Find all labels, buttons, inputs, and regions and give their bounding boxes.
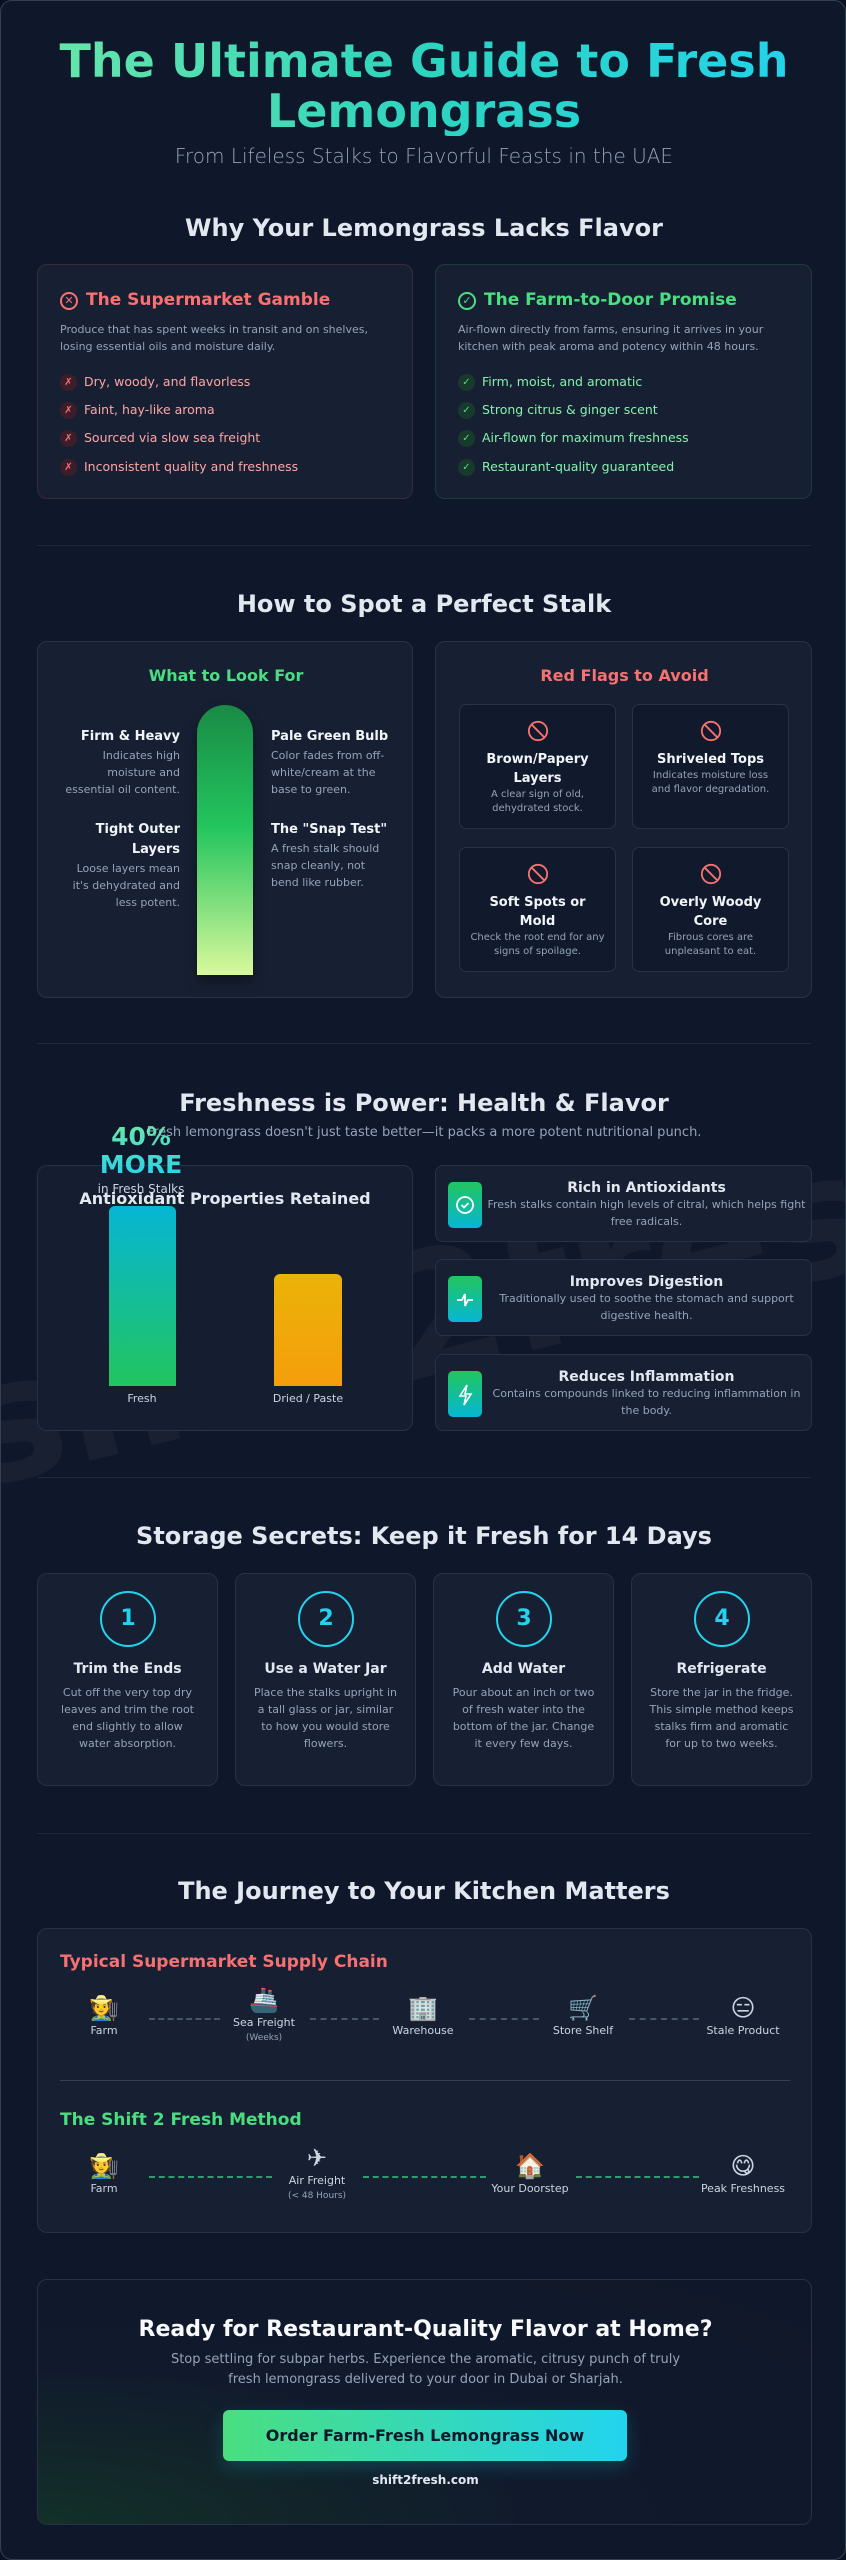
step 4: [631, 1573, 812, 1786]
flag: soft spots: signs of spoilage.: [494, 946, 581, 957]
label: firm & heavy: moisture and: [107, 766, 180, 779]
list: gamble negatives: ✗: [64, 433, 73, 444]
flag: woody core: [632, 847, 789, 972]
step 3: [433, 1573, 614, 1786]
heading: journey: The Journey to Your Kitchen Matters: [178, 1877, 670, 1905]
flag: soft spots: Soft Spots or: [489, 895, 586, 910]
panel: farm to door: [435, 264, 812, 499]
button: order: [223, 2410, 627, 2461]
label: tight outer layers: it's dehydrated and: [73, 879, 180, 892]
step 2: [235, 1573, 416, 1786]
text: website: shift2fresh.com: [372, 2473, 479, 2487]
label: snap test: A fresh stalk should: [271, 842, 379, 855]
label: tight outer layers: [73, 822, 180, 909]
flow: shift 2 fresh: Farm: [90, 2182, 118, 2195]
label: snap test: [271, 822, 387, 889]
panel: red flags: [435, 641, 812, 998]
heading: farm to door: The Farm-to-Door Promise: [484, 290, 737, 310]
flag: brown papery layers: Layers: [513, 771, 562, 786]
step 3: 3: [516, 1606, 532, 1631]
card: inflammation: Reduces Inflammation: [559, 1369, 734, 1385]
flow: supermarket chain: 😑: [730, 1994, 756, 2022]
label: pale green bulb: white/cream at the: [271, 766, 375, 779]
flag: soft spots: [459, 847, 616, 972]
flag: shriveled tops: Indicates moisture loss: [653, 770, 768, 781]
heading: cta: Ready for Restaurant-Quality Flavor at Home?: [138, 2317, 712, 2342]
label: tight outer layers: Loose layers mean: [77, 862, 180, 875]
label: firm & heavy: essential oil content.: [65, 783, 180, 796]
panel: call to action: [37, 2279, 812, 2525]
callout: in fresh stalks: in Fresh Stalks: [98, 1182, 184, 1196]
text: promise description: Air-flown directly from farms, ensuring it arrives in your kitchen with peak aroma and potency within 48 hours.: [458, 323, 763, 353]
panel: what to look for: [37, 641, 413, 998]
bar: dried: [274, 1274, 342, 1386]
heading: freshness is power: Freshness is Power: Health & Flavor: [179, 1089, 669, 1117]
flow: supermarket chain: 🧑‍🌾: [89, 1994, 119, 2022]
flow: supermarket chain: Stale Product: [706, 2024, 780, 2037]
step 1: Trim the Ends: [73, 1661, 182, 1677]
list: promise positives: Restaurant-quality guaranteed: [482, 459, 674, 474]
card: inflammation: [435, 1354, 812, 1431]
label: tight outer layers: less potent.: [116, 896, 180, 909]
heading: supermarket gamble: The Supermarket Gamble: [86, 290, 330, 310]
list: gamble negatives: Sourced via slow sea freight: [84, 430, 260, 445]
flow: supermarket chain: [89, 1986, 780, 2043]
step 3: Add Water: [482, 1661, 565, 1677]
label: firm & heavy: [65, 729, 180, 796]
flag: shriveled tops: Shriveled Tops: [657, 752, 764, 767]
flow: shift 2 fresh: ✈: [307, 2144, 327, 2172]
flow: supermarket chain: Warehouse: [392, 2024, 454, 2037]
button: order: Order Farm-Fresh Lemongrass Now: [266, 2426, 584, 2445]
flag: woody core: Fibrous cores are: [668, 932, 753, 943]
flag: woody core: Core: [694, 914, 727, 929]
list: gamble negatives: Faint, hay-like aroma: [84, 402, 215, 417]
text: freshness subtitle: Fresh lemongrass doesn't just taste better—it packs a more potent nutritional punch.: [147, 1125, 701, 1140]
card: antioxidants: Fresh stalks contain high levels of citral, which helps fight free radicals.: [488, 1198, 805, 1228]
step 4: Store the jar in the fridge. This simple method keeps stalks firm and aromatic for up to two weeks.: [650, 1686, 793, 1750]
flag: soft spots: Mold: [520, 914, 555, 929]
label: pale green bulb: [271, 729, 388, 796]
label: snap test: The "Snap Test": [271, 822, 387, 837]
label: pale green bulb: Pale Green Bulb: [271, 729, 388, 744]
flag: brown papery layers: dehydrated stock.: [492, 803, 583, 814]
heading: farm to door: ✓: [462, 294, 472, 307]
list: gamble negatives: ✗: [64, 377, 73, 388]
list: gamble negatives: ✗: [64, 405, 73, 416]
panel: supermarket gamble: [37, 264, 413, 499]
card: antioxidants: [435, 1165, 812, 1242]
flag: brown papery layers: Brown/Papery: [486, 752, 589, 767]
flow: supermarket chain: 🛒: [568, 1994, 598, 2022]
list: promise positives: ✓: [462, 405, 471, 416]
flag: brown papery layers: A clear sign of old,: [491, 789, 584, 800]
heading: what to look for: What to Look For: [149, 666, 303, 685]
label: snap test: bend like rubber.: [271, 876, 364, 889]
flow: supermarket chain: Store Shelf: [553, 2024, 613, 2037]
heading: storage secrets: Storage Secrets: Keep it Fresh for 14 Days: [136, 1522, 712, 1550]
subtitle: From Lifeless Stalks to Flavorful Feasts in the UAE: [175, 144, 673, 168]
heading: red flags: Red Flags to Avoid: [540, 666, 709, 685]
list: gamble negatives: Inconsistent quality and freshness: [84, 459, 298, 474]
step 4: 4: [714, 1606, 730, 1631]
callout: 40% more: MORE: [100, 1150, 182, 1179]
callout: 40% more: 40%: [111, 1122, 171, 1151]
label: firm & heavy: Firm & Heavy: [81, 729, 180, 744]
step 2: Use a Water Jar: [264, 1661, 387, 1677]
step 1: 1: [120, 1606, 136, 1631]
text: gamble description: Produce that has spent weeks in transit and on shelves, losing essential oils and moisture daily.: [60, 323, 368, 353]
label: dried: Dried / Paste: [273, 1392, 343, 1405]
heading: shift 2 fresh method: The Shift 2 Fresh Method: [60, 2110, 302, 2130]
label: tight outer layers: Layers: [132, 842, 180, 857]
flag: brown papery layers: [459, 704, 616, 829]
text: cta description: Stop settling for subpar herbs. Experience the aromatic, citrusy punch of truly fresh lemongrass delivered to your door in Dubai or Sharjah.: [171, 2352, 680, 2387]
flow: shift 2 fresh: (< 48 Hours): [288, 2191, 346, 2201]
label: snap test: snap cleanly, not: [271, 859, 365, 872]
chart title: Antioxidant Properties Retained: [79, 1189, 371, 1208]
flow: supermarket chain: 🏢: [408, 1994, 438, 2022]
step 2: 2: [318, 1606, 334, 1631]
flow: supermarket chain: Sea Freight: [233, 2016, 295, 2029]
step 4: Refrigerate: [676, 1661, 767, 1677]
flow: shift 2 fresh: Air Freight: [289, 2174, 345, 2187]
list: gamble negatives: ✗: [64, 462, 73, 473]
flag: woody core: Overly Woody: [660, 895, 761, 910]
step 1: Cut off the very top dry leaves and trim the root end slightly to allow water absorption.: [61, 1686, 194, 1750]
heading: why lacks flavor: Why Your Lemongrass Lacks Flavor: [185, 214, 663, 242]
label: fresh: Fresh: [127, 1392, 157, 1405]
list: promise positives: [458, 374, 689, 476]
step 3: Pour about an inch or two of fresh water into the bottom of the jar. Change it every few days.: [453, 1686, 594, 1750]
list: promise positives: ✓: [462, 377, 471, 388]
list: promise positives: Firm, moist, and aromatic: [482, 374, 642, 389]
label: firm & heavy: Indicates high: [103, 749, 180, 762]
title: The Ultimate Guide to Fresh: [60, 34, 788, 88]
heading: spot a perfect stalk: How to Spot a Perfect Stalk: [237, 590, 611, 618]
list: gamble negatives: [60, 374, 298, 476]
panel: journey: [37, 1928, 812, 2233]
flow: shift 2 fresh: Your Doorstep: [491, 2182, 569, 2195]
step 2: Place the stalks upright in a tall glass or jar, similar to how you would store flowers.: [254, 1686, 397, 1750]
title: [1, 36, 846, 136]
flag: woody core: unpleasant to eat.: [665, 946, 756, 957]
list: promise positives: Strong citrus & ginger scent: [482, 402, 658, 417]
flow: supermarket chain: 🚢: [249, 1986, 279, 2014]
label: tight outer layers: Tight Outer: [96, 822, 180, 837]
label: pale green bulb: base to green.: [271, 783, 351, 796]
flow: supermarket chain: (Weeks): [246, 2033, 282, 2043]
heading: supermarket gamble: ✕: [64, 294, 74, 307]
list: promise positives: Air-flown for maximum freshness: [482, 430, 689, 445]
step 1: [37, 1573, 218, 1786]
label: pale green bulb: Color fades from off-: [271, 749, 384, 762]
flow: shift 2 fresh: 🧑‍🌾: [89, 2152, 119, 2180]
flag: shriveled tops: and flavor degradation.: [652, 784, 769, 795]
callout: 40% more: [71, 1123, 211, 1179]
list: promise positives: ✓: [462, 433, 471, 444]
card: digestion: Improves Digestion: [570, 1274, 723, 1290]
flag: soft spots: Check the root end for any: [470, 932, 605, 943]
illustration: stalk: [197, 705, 253, 975]
heading: supermarket chain: Typical Supermarket Supply Chain: [60, 1952, 388, 1972]
flow: shift 2 fresh: Peak Freshness: [701, 2182, 785, 2195]
flow: supermarket chain: Farm: [90, 2024, 118, 2037]
flow: shift 2 fresh: [89, 2144, 785, 2201]
flag: shriveled tops: [632, 704, 789, 829]
title: Lemongrass: [267, 84, 581, 138]
flow: shift 2 fresh: 😋: [730, 2152, 756, 2180]
bar: fresh: [109, 1206, 176, 1386]
card: digestion: Traditionally used to soothe the stomach and support digestive health.: [499, 1292, 794, 1322]
list: gamble negatives: Dry, woody, and flavorless: [84, 374, 250, 389]
card: antioxidants: Rich in Antioxidants: [567, 1180, 726, 1196]
flow: shift 2 fresh: 🏠: [515, 2152, 545, 2180]
card: digestion: [435, 1259, 812, 1336]
panel: antioxidant chart: [37, 1165, 413, 1431]
card: inflammation: Contains compounds linked to reducing inflammation in the body.: [493, 1387, 800, 1417]
list: promise positives: ✓: [462, 462, 471, 473]
